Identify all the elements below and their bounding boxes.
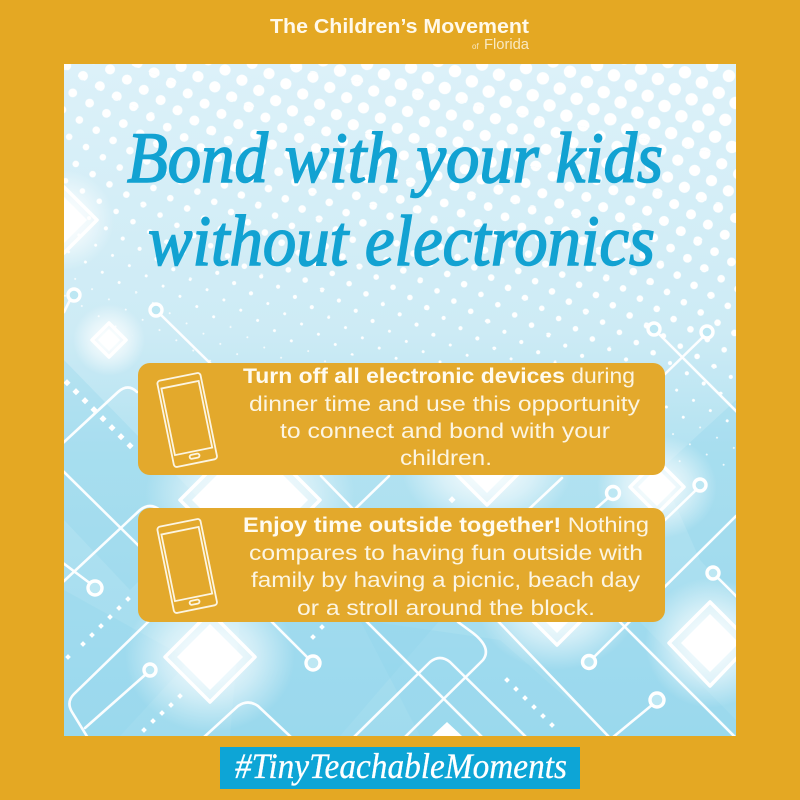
hashtag banner: #TinyTeachableMoments — [235, 746, 567, 786]
organisation logo text: The Children’s Movement — [270, 15, 529, 38]
tip 1 text — [243, 365, 641, 470]
tip 1 text: Turn off all electronic devices during — [243, 365, 635, 388]
title: without electronics — [148, 201, 655, 281]
tip 2 text: or a stroll around the block. — [297, 597, 595, 620]
tinted diagonal tiles — [64, 360, 736, 678]
glowing diamonds — [31, 187, 751, 736]
glows behind diamonds — [64, 180, 736, 726]
tip 2 text — [243, 514, 649, 620]
title — [127, 118, 663, 281]
panel: tip 1 — [138, 363, 665, 475]
tip 1 text: dinner time and use this opportunity — [249, 393, 641, 416]
panel: blue circuit background — [64, 64, 736, 736]
organisation logo text: of — [472, 42, 479, 51]
organisation logo text — [270, 15, 530, 53]
tip 2 text: Enjoy time outside together! Nothing — [243, 514, 649, 537]
tip 2 text: compares to having fun outside with — [249, 542, 643, 565]
panel: tip 2 — [138, 508, 665, 622]
title: Bond with your kids — [127, 118, 663, 198]
circuit node rings — [68, 289, 719, 707]
organisation logo text: Florida — [484, 36, 530, 53]
icon: smartphone — [157, 372, 218, 467]
circuit lines — [63, 300, 738, 738]
tip 1 text: to connect and bond with your — [280, 420, 610, 443]
halftone dots — [64, 64, 736, 466]
tip 2 text: family by having a picnic, beach day — [251, 569, 641, 592]
icon: smartphone — [157, 518, 218, 613]
dotted circuit traces — [63, 379, 555, 733]
tip 1 text: children. — [400, 447, 492, 470]
